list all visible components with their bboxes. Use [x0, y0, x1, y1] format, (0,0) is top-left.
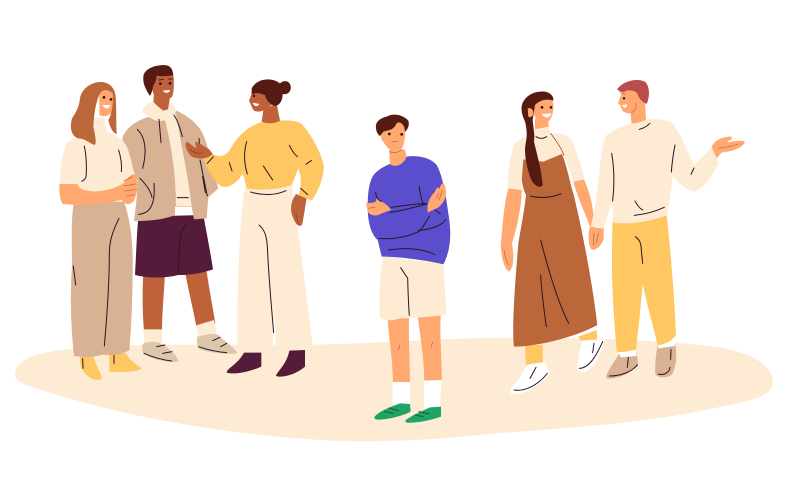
- hand right: [427, 183, 446, 213]
- head: [249, 87, 273, 112]
- socks: [525, 330, 597, 367]
- hair with braid: [522, 92, 553, 187]
- head: [533, 97, 553, 123]
- sweater: [203, 120, 324, 201]
- boots: [80, 353, 142, 380]
- head: [381, 121, 405, 152]
- neck: [630, 103, 646, 125]
- head: [618, 90, 646, 114]
- hair: [143, 65, 173, 96]
- hair: [252, 79, 291, 106]
- neck: [389, 150, 407, 166]
- face: [99, 89, 113, 116]
- shoes: [510, 339, 605, 394]
- shorts: [135, 215, 213, 277]
- arms: [501, 179, 604, 272]
- person: woman in yellow sweater: [186, 79, 324, 377]
- raised hand: [712, 137, 745, 158]
- dress: [513, 153, 597, 347]
- hand: [589, 227, 604, 250]
- smile and eyes: [163, 90, 170, 93]
- person: man in cream sweater: [589, 80, 745, 379]
- socks: [618, 342, 675, 357]
- arm: [59, 174, 137, 205]
- person: woman with long hair: [59, 82, 142, 380]
- smile and eyes: [103, 105, 110, 109]
- trousers: [237, 185, 313, 349]
- shoes: [374, 403, 441, 423]
- group of three people talking: [59, 65, 324, 380]
- person: man with crossed arms: [366, 115, 450, 423]
- shoes: [606, 344, 676, 379]
- person: woman in brown dress: [501, 92, 605, 394]
- socks: [393, 380, 442, 408]
- legs: [387, 313, 442, 387]
- neck: [153, 93, 171, 111]
- hand left: [366, 198, 391, 215]
- sweater: [368, 156, 450, 264]
- head: [152, 75, 174, 99]
- hair: [617, 80, 649, 104]
- hand on hip: [291, 194, 307, 226]
- trousers: [612, 215, 676, 352]
- socks: [144, 320, 217, 343]
- shorts: [379, 257, 447, 320]
- ground blob: [15, 338, 773, 441]
- shoes: [142, 334, 237, 362]
- legs: [143, 272, 215, 332]
- neck: [535, 118, 549, 129]
- blouse: [507, 127, 585, 190]
- top: [60, 117, 134, 191]
- hand: [186, 142, 213, 159]
- sweater: [591, 119, 718, 228]
- jacket: [122, 110, 218, 221]
- hair: [71, 82, 117, 145]
- hair: [376, 115, 409, 136]
- couple holding hands: [501, 80, 745, 394]
- trousers: [71, 202, 133, 357]
- boots: [227, 350, 305, 377]
- hoodie: [165, 113, 192, 206]
- neck: [262, 103, 280, 123]
- person: man in jacket: [122, 65, 237, 362]
